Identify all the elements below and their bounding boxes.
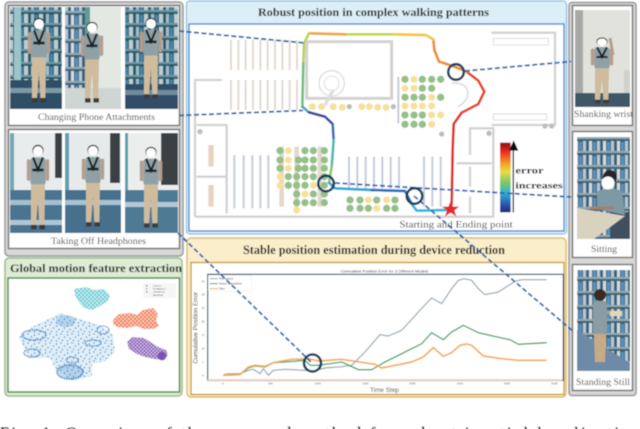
photo: walking away from window <box>125 133 178 233</box>
ticks: 3000 <box>504 381 511 385</box>
ticks <box>201 279 558 385</box>
panel: global motion feature extraction <box>5 258 183 396</box>
photo: hand at headphones <box>10 133 62 233</box>
panel: robust position <box>186 1 566 234</box>
orange curve <box>223 344 547 375</box>
legend: Context <box>153 284 161 288</box>
legend: Headphones <box>153 288 165 290</box>
ticks: 2000 <box>409 381 416 385</box>
caption: shanking wrist: Shanking wrist <box>574 109 634 119</box>
heading: robust position: Robust position in complex walking patterns <box>258 7 490 19</box>
chart legend: Full sensors <box>219 277 234 281</box>
chart legend <box>208 275 252 291</box>
ticks: 25 <box>201 306 205 310</box>
caption: sitting: Sitting <box>591 244 618 254</box>
ticks: 2500 <box>456 381 463 385</box>
heading: stable position: Stable position estimation during device reduction <box>243 242 506 257</box>
panel: sitting <box>572 132 632 258</box>
caption: changing phone attachments: Changing Phone Attachments <box>38 112 156 122</box>
trajectory <box>302 33 484 211</box>
photo: waving hand <box>575 10 630 107</box>
ticks: 10 <box>201 347 205 351</box>
arrow: error increases <box>510 142 517 212</box>
label: error increases: error <box>515 166 545 177</box>
shelves <box>231 40 297 110</box>
dashed connector lines <box>178 31 574 363</box>
ticks: 1500 <box>362 381 369 385</box>
ticks: 20 <box>201 320 205 324</box>
ticks: 0 <box>202 374 204 378</box>
green seats <box>280 79 441 208</box>
caption: standing still: Standing Still <box>576 377 631 387</box>
photo: walking with phone in hand <box>125 7 178 109</box>
photo: walking while phoning <box>65 7 121 109</box>
axis label y: Cumulative Position Error <box>193 292 200 364</box>
floor plan map <box>195 33 563 230</box>
gray curve <box>223 279 547 375</box>
ticks: 3500 <box>551 381 558 385</box>
photo: standing in library <box>577 270 630 371</box>
green curve <box>223 325 547 375</box>
panel: shaking wrist <box>572 6 634 126</box>
yellow seats <box>280 79 441 210</box>
panel: changing phone attachments <box>8 6 180 126</box>
legend: MOTION <box>153 294 163 297</box>
heading: global motion: Global motion feature extraction <box>10 263 183 275</box>
walls <box>195 33 555 217</box>
highlight circles <box>304 64 464 371</box>
axis label x: Time Step <box>370 387 399 394</box>
caption: taking off headphones: Taking Off Headphones <box>51 236 147 246</box>
photo: sitting at desk <box>577 137 630 239</box>
floor plan map: increases <box>515 181 563 192</box>
chart: t-SNE clusters <box>19 283 176 381</box>
panel: standing still <box>572 264 632 390</box>
ticks: 500 <box>268 381 273 385</box>
panel: stable position estimation <box>187 238 566 397</box>
chart legend: Ours <box>219 287 226 291</box>
panel: taking off headphones <box>8 130 180 248</box>
chart title: Cumulative Position Error for 3 Different Models <box>341 269 428 274</box>
ticks: 5 <box>202 360 204 364</box>
line chart: cumulative position error <box>193 269 563 394</box>
legend: Attachment <box>153 290 165 294</box>
ticks: 30 <box>201 293 205 297</box>
chart legend: Sensor degradation <box>219 282 242 286</box>
panel: stationary activities <box>569 2 636 396</box>
ticks: 1000 <box>314 381 321 385</box>
desks top right <box>493 38 548 120</box>
ticks: 35 <box>201 279 205 283</box>
panel: walking variations <box>5 2 183 256</box>
ticks: 0 <box>222 381 224 385</box>
star: start point <box>442 201 459 216</box>
legend <box>143 283 176 298</box>
photo: walking in library aisle <box>10 7 62 109</box>
ticks: 15 <box>201 333 205 337</box>
label: starting and ending point: Starting and Ending point <box>399 219 513 230</box>
photo: holding phone with both hands <box>65 133 121 233</box>
